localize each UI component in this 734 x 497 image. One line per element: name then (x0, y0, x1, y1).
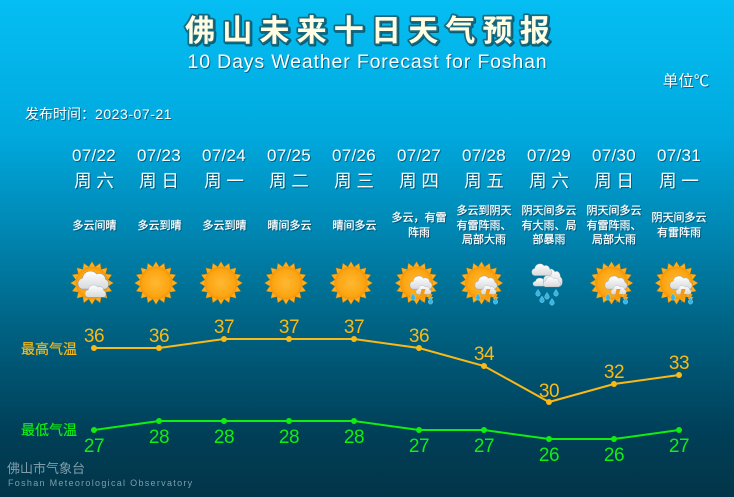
weather descriptions: 阵雨 (408, 225, 430, 239)
low temperature line chart: 27 (474, 436, 494, 457)
low temperature line chart: 27 (669, 436, 689, 457)
icon: sunny 07/24 (200, 262, 242, 304)
dates row: 07/31 (657, 146, 701, 165)
title: 佛山未来十日天气预报 (185, 15, 557, 48)
footer: observatory name (7, 461, 193, 488)
weather descriptions: 多云，有雷 (392, 210, 446, 224)
icon: thunderstorm 07/30 (590, 262, 633, 304)
low temperature line chart: 27 (84, 436, 104, 457)
weather descriptions: 阴天间多云 (652, 210, 706, 224)
icon: sunny 07/26 (330, 262, 372, 304)
weekdays row: 周 一 (659, 171, 699, 191)
high temperature line chart: 37 (214, 317, 234, 338)
weekdays row: 周 二 (269, 171, 309, 191)
weekdays row: 周 日 (139, 171, 179, 191)
weather descriptions: 局部大雨 (462, 232, 506, 246)
high temperature line chart (84, 317, 689, 405)
icon: thunderstorm 07/31 (655, 262, 698, 304)
dates row: 07/28 (462, 146, 506, 165)
weather descriptions (72, 203, 706, 246)
weather descriptions: 有雷阵雨 (657, 225, 701, 239)
high temperature line chart: 32 (604, 362, 624, 383)
weekdays row: 周 六 (74, 171, 114, 191)
high temperature line chart: 37 (279, 317, 299, 338)
low temperature line chart: 26 (604, 445, 624, 466)
weather descriptions: 阴天间多云 (522, 203, 576, 217)
dates row: 07/24 (202, 146, 246, 165)
weather descriptions: 阴天间多云 (586, 203, 642, 217)
dates row (72, 146, 701, 165)
weather descriptions: 多云到晴 (138, 218, 182, 232)
low temperature line chart: 28 (344, 427, 364, 448)
high temperature line chart: 37 (344, 317, 364, 338)
unit label: 单位℃ (663, 72, 709, 90)
weather descriptions: 晴间多云 (268, 218, 312, 232)
icon: heavy rain 07/29 (532, 264, 562, 305)
icon: sun with clouds 07/22 (70, 262, 114, 304)
weather descriptions: 局部大雨 (592, 232, 636, 246)
dates row: 07/26 (332, 146, 376, 165)
dates row: 07/22 (72, 146, 116, 165)
publish time: 发布时间：2023-07-21 (25, 106, 172, 122)
weekdays row: 周 三 (334, 171, 374, 191)
low temperature line chart: 28 (279, 427, 299, 448)
dates row: 07/30 (592, 146, 636, 165)
subtitle: 10 Days Weather Forecast for Foshan (188, 51, 547, 73)
high temperature line chart: 36 (149, 326, 169, 347)
weather descriptions: 多云间晴 (72, 218, 116, 232)
high temperature line chart: 36 (409, 326, 429, 347)
icon: thunderstorm 07/28 (460, 262, 503, 304)
dates row: 07/27 (397, 146, 441, 165)
weather descriptions: 有雷阵雨、 (586, 218, 642, 232)
weather descriptions: 多云到阴天 (456, 203, 512, 217)
weekdays row: 周 日 (594, 171, 634, 191)
high temperature label: 最高气温 (21, 341, 77, 357)
weather descriptions: 部暴雨 (532, 232, 566, 246)
high temperature line chart: 33 (669, 353, 689, 374)
low temperature line chart: 28 (214, 427, 234, 448)
low temperature line chart: 28 (149, 427, 169, 448)
dates row: 07/23 (137, 146, 181, 165)
weather descriptions: 晴间多云 (332, 218, 376, 232)
low temperature label: 最低气温 (21, 422, 77, 438)
weather descriptions: 有雷阵雨、 (456, 218, 512, 232)
dates row: 07/25 (267, 146, 311, 165)
icon: sunny 07/23 (134, 262, 178, 304)
high temperature line chart: 30 (539, 381, 559, 402)
high temperature line chart: 34 (474, 344, 495, 365)
weekdays row: 周 五 (464, 171, 504, 191)
low temperature line chart: 27 (409, 436, 429, 457)
weather descriptions: 多云到晴 (202, 218, 246, 232)
low temperature line chart: 26 (539, 445, 559, 466)
weekdays row (74, 171, 699, 191)
high temperature line chart: 36 (84, 326, 104, 347)
weekdays row: 周 一 (204, 171, 244, 191)
low temperature line chart (84, 418, 689, 466)
weekdays row: 周 四 (399, 171, 439, 191)
footer: observatory name: Foshan Meteorological Observatory (8, 478, 193, 488)
footer: observatory name: 佛山市气象台 (7, 461, 85, 476)
icon: thunderstorm 07/27 (395, 262, 438, 304)
icon: sunny 07/25 (264, 262, 308, 304)
weekdays row: 周 六 (529, 171, 569, 191)
dates row: 07/29 (527, 146, 571, 165)
weather descriptions: 有大雨、局 (522, 218, 576, 232)
